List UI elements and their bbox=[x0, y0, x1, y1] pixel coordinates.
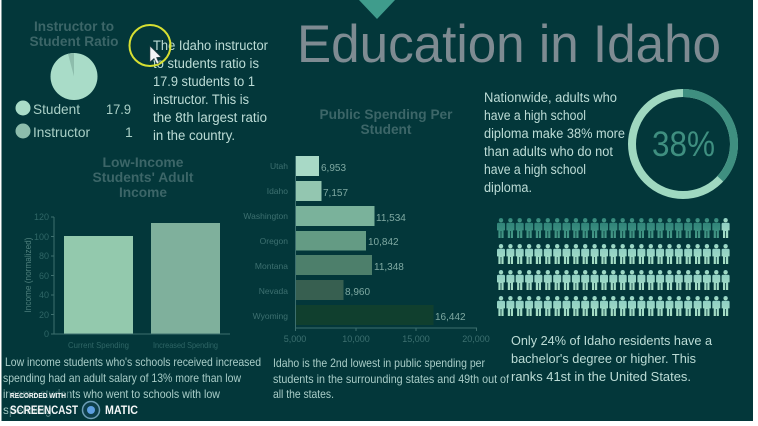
bar chart: spending by state: 10,000 bbox=[342, 334, 370, 344]
bar chart: spending by state: 16,442 bbox=[435, 312, 466, 323]
bar chart: spending by state: Montana bbox=[255, 261, 288, 271]
bar chart: income bbox=[23, 212, 230, 350]
text: ratio description: the 8th largest ratio bbox=[153, 110, 267, 125]
panel: instructor to student ratio bbox=[16, 18, 268, 143]
text: low-income description: spending. bbox=[3, 403, 55, 417]
heading: instructor ratio bbox=[30, 18, 118, 49]
donut chart: 38%: 38% bbox=[652, 125, 715, 164]
bar chart: spending by state: Nevada bbox=[259, 286, 288, 296]
heading: public spending bbox=[320, 106, 453, 137]
bar chart: spending by state: 6,953 bbox=[321, 163, 346, 174]
legend: 17.9 bbox=[106, 101, 131, 117]
text: diploma description bbox=[484, 90, 625, 195]
bar chart: income: 40 bbox=[39, 290, 49, 300]
bar chart: income: 60 bbox=[39, 271, 49, 281]
bar chart: income: 120 bbox=[34, 212, 49, 222]
heading: instructor ratio: Student Ratio bbox=[30, 33, 118, 49]
bar chart: spending by state: 7,157 bbox=[323, 188, 348, 199]
pie chart bbox=[50, 53, 98, 100]
icon: top diamond bbox=[359, 0, 395, 19]
text: bachelor's degree description: ranks 41st in the United States. bbox=[511, 369, 691, 384]
text: ratio description bbox=[153, 38, 268, 143]
bar chart: spending by state: 11,348 bbox=[374, 262, 404, 273]
heading: public spending: Public Spending Per bbox=[320, 106, 453, 122]
bar chart: spending by state: Utah bbox=[270, 161, 288, 171]
panel: high school diploma bbox=[484, 90, 734, 195]
heading: low-income: Income bbox=[119, 184, 167, 200]
bar chart: spending by state: 5,000 bbox=[284, 334, 306, 344]
legend: 1 bbox=[125, 124, 133, 140]
watermark: recorded with screencast-o-matic: RECORDED WITH bbox=[10, 391, 66, 400]
text: bachelor's degree description: Only 24% of Idaho residents have a bbox=[511, 333, 713, 348]
bar chart: income: Increased Spending bbox=[153, 340, 218, 350]
bar chart: spending by state: 15,000 bbox=[402, 334, 430, 344]
heading: low-income: Students' Adult bbox=[92, 169, 194, 185]
panel: low-income adult income bbox=[3, 154, 261, 417]
text: bachelor's degree description bbox=[511, 333, 713, 384]
watermark: recorded with screencast-o-matic: MATIC bbox=[105, 403, 138, 417]
heading: low-income bbox=[92, 154, 194, 200]
heading: low-income: Low-Income bbox=[102, 154, 184, 170]
text: diploma description: than adults who do not bbox=[484, 144, 613, 159]
panel: bachelor's degree pictogram bbox=[497, 218, 730, 384]
watermark: recorded with screencast-o-matic bbox=[8, 390, 138, 418]
bar chart: spending by state: Wyoming bbox=[253, 311, 288, 321]
bar chart: income: Income (normalized) bbox=[23, 238, 33, 312]
text: diploma description: diploma make 38% more bbox=[484, 126, 625, 141]
heading: public spending: Student bbox=[360, 121, 412, 137]
text: low-income description: spending had an adult salary of 13% more than low bbox=[3, 371, 241, 385]
text: low-income description: Low income students who's schools received increased bbox=[5, 355, 261, 369]
donut chart: 38% bbox=[632, 93, 734, 195]
text: ratio description: in the country. bbox=[153, 128, 235, 143]
text: diploma description: Nationwide, adults who bbox=[484, 90, 617, 105]
text: spending description: all the states. bbox=[273, 387, 334, 401]
title: Education in Idaho bbox=[297, 15, 721, 74]
watermark: recorded with screencast-o-matic: SCREENCAST bbox=[10, 403, 79, 417]
heading: instructor ratio: Instructor to bbox=[34, 18, 114, 34]
text: ratio description: 17.9 students to 1 bbox=[153, 74, 255, 89]
text: spending description: students in the surrounding states and 49th out of bbox=[273, 372, 510, 386]
bar chart: income: 0 bbox=[44, 329, 49, 339]
bar chart: spending by state: 10,842 bbox=[368, 237, 399, 248]
bar chart: spending by state: Idaho bbox=[267, 186, 288, 196]
text: low-income description bbox=[3, 355, 261, 417]
text: spending description bbox=[273, 356, 510, 401]
highlight: yellow cursor ring bbox=[130, 25, 170, 66]
bar chart: income: 80 bbox=[39, 251, 49, 261]
text: low-income description: income students who went to schools with low bbox=[3, 387, 220, 401]
legend: Instructor bbox=[33, 124, 90, 140]
text: ratio description: instructor. This is bbox=[153, 92, 249, 107]
bar chart: income: 20 bbox=[39, 310, 49, 320]
text: diploma description: have a high school bbox=[484, 162, 586, 177]
text: ratio description: The Idaho instructor bbox=[153, 38, 268, 53]
text: bachelor's degree description: bachelor's degree or higher. This bbox=[511, 351, 696, 366]
bar chart: spending by state: 20,000 bbox=[462, 334, 490, 344]
legend: Student bbox=[33, 101, 80, 117]
icon: mouse cursor bbox=[150, 46, 161, 64]
bar chart: spending by state: Washington bbox=[243, 211, 288, 221]
legend bbox=[16, 100, 133, 140]
bar chart: spending by state: Oregon bbox=[260, 236, 288, 246]
bar chart: spending by state bbox=[243, 156, 490, 344]
bar chart: income: 100 bbox=[34, 232, 49, 242]
panel: public spending per student bbox=[243, 106, 510, 401]
text: diploma description: diploma. bbox=[484, 180, 532, 195]
bar chart: income: Current Spending bbox=[68, 340, 129, 350]
bar chart: spending by state: 8,960 bbox=[345, 287, 370, 298]
text: diploma description: have a high school bbox=[484, 108, 586, 123]
pictogram: 100 people bbox=[497, 218, 730, 316]
text: ratio description: to students ratio is bbox=[153, 56, 259, 71]
bar chart: spending by state: 11,534 bbox=[376, 213, 406, 224]
text: spending description: Idaho is the 2nd lowest in public spending per bbox=[273, 356, 485, 370]
